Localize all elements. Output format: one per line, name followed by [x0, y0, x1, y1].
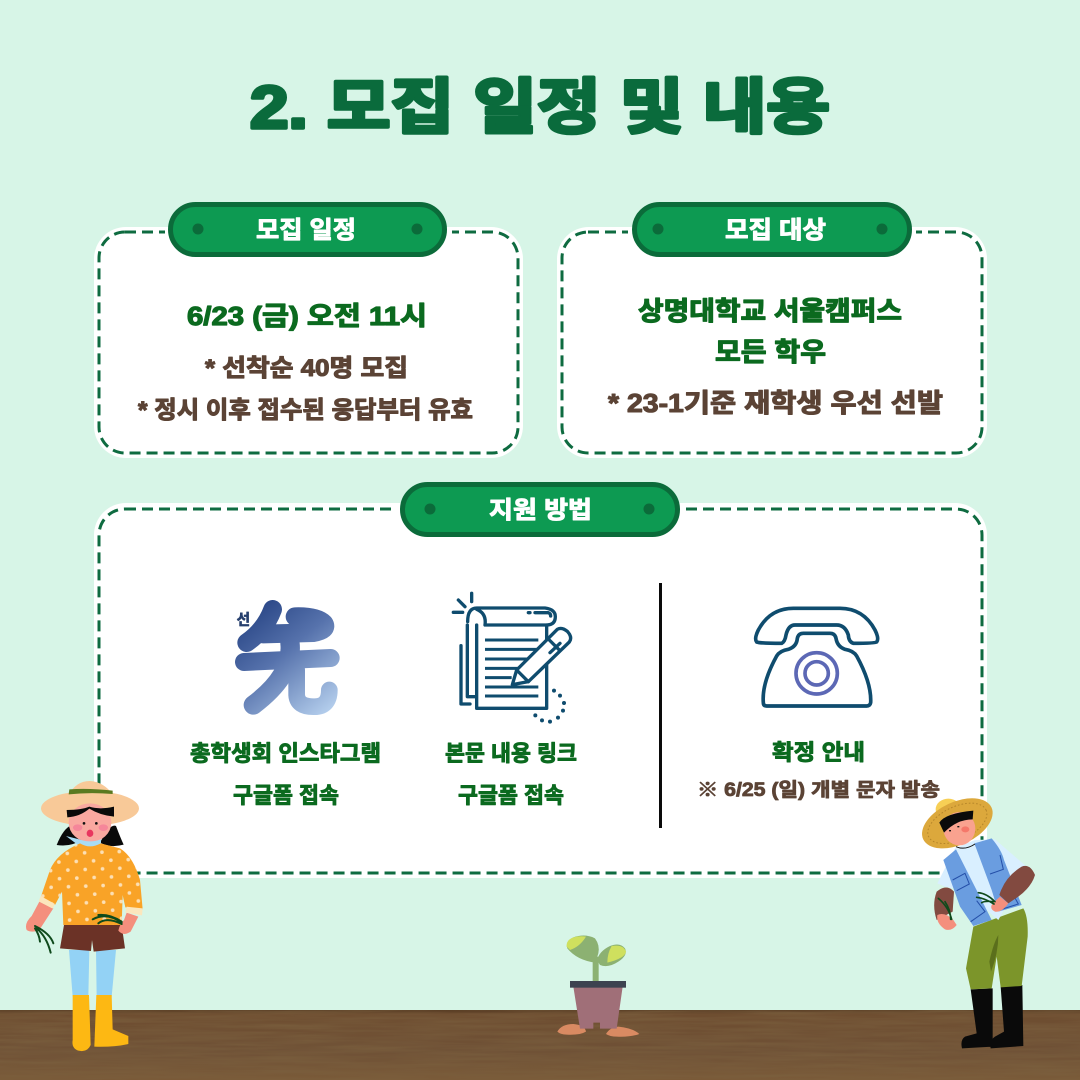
pill: recruitment target [628, 204, 916, 254]
hands [937, 897, 1008, 930]
hands [26, 902, 138, 934]
hat [914, 788, 1000, 859]
floor [0, 1010, 1080, 1080]
legs [69, 950, 116, 997]
vertical divider [659, 583, 662, 828]
label: google form 2: 구글폼 접속 [458, 783, 564, 808]
sweater [41, 843, 143, 925]
target school: 상명대학교 서울캠퍼스 [638, 296, 902, 326]
note: priority: * 23-1기준 재학생 우선 선발 [608, 388, 943, 418]
label: google form 1: 구글폼 접속 [233, 783, 339, 808]
icon: telephone [756, 608, 878, 706]
label: student council instagram: 총학생회 인스타그램 [190, 741, 381, 766]
target majors: 모든 학우 [715, 337, 826, 367]
hat [41, 781, 139, 826]
panel: recruitment target [557, 204, 987, 458]
illustration: seedling pot [557, 936, 639, 1037]
trousers [966, 908, 1028, 989]
pill: recruitment target: 모집 대상 [725, 217, 826, 244]
pill: recruitment schedule: 모집 일정 [256, 217, 356, 244]
schedule date: 6/23 (금) 오전 11시 [187, 301, 427, 331]
vest [943, 838, 1022, 926]
sleeves [934, 887, 954, 920]
boots [72, 995, 128, 1051]
note: valid responses: * 정시 이후 접수된 응답부터 유효 [138, 397, 473, 424]
panel: recruitment schedule [94, 204, 523, 458]
shirt [937, 839, 1027, 920]
panel: how to apply [94, 484, 987, 878]
grass [35, 915, 122, 953]
grass [938, 893, 995, 919]
icon: seon character [237, 609, 331, 707]
illustration: man farmer [914, 788, 1035, 1048]
pill: how to apply [396, 484, 684, 534]
icon: document and pencil [453, 593, 571, 724]
boots [961, 985, 1023, 1048]
small label: 선 [237, 612, 250, 629]
note: text message date: ※ 6/25 (일) 개별 문자 발송 [697, 779, 940, 801]
pill: recruitment schedule [165, 204, 452, 254]
pill: how to apply: 지원 방법 [489, 497, 592, 524]
label: confirmation notice: 확정 안내 [772, 740, 865, 765]
note: first come: * 선착순 40명 모집 [205, 355, 408, 382]
label: body link: 본문 내용 링크 [445, 741, 577, 766]
title: 2. 모집 일정 및 내용 [250, 74, 830, 141]
illustration: woman farmer [26, 781, 143, 1051]
shorts [60, 925, 125, 952]
